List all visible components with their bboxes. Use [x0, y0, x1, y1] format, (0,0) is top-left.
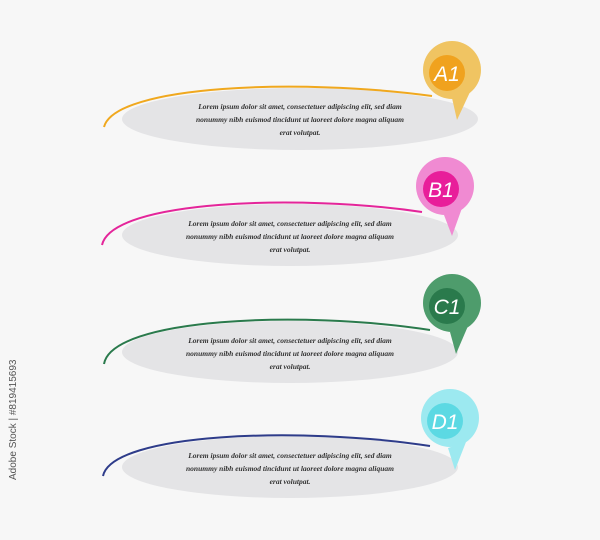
panel: C1: erat volutpat. — [270, 362, 311, 371]
panel: B1: B1 — [428, 179, 454, 202]
panel: B1: Lorem ipsum dolor sit amet, consectetuer adipiscing elit, sed diam — [187, 219, 392, 228]
panel: B1: erat volutpat. — [270, 245, 311, 254]
panel: A1: nonummy nibh euismod tincidunt ut laoreet dolore magna aliquam — [196, 115, 404, 124]
panel: D1: nonummy nibh euismod tincidunt ut laoreet dolore magna aliquam — [186, 464, 394, 473]
panel: D1: erat volutpat. — [270, 477, 311, 486]
panel: C1: Lorem ipsum dolor sit amet, consectetuer adipiscing elit, sed diam — [187, 336, 392, 345]
panel: C1 — [104, 274, 481, 383]
panel: B1 — [102, 157, 474, 266]
panel: D1 — [103, 389, 479, 498]
panel: A1 — [104, 41, 481, 150]
panel: A1: erat volutpat. — [280, 128, 321, 137]
panel: A1: Lorem ipsum dolor sit amet, consectetuer adipiscing elit, sed diam — [197, 102, 402, 111]
watermark id: Adobe Stock | #819415693 — [8, 359, 19, 480]
panel: C1: C1 — [434, 296, 460, 319]
panel: D1: Lorem ipsum dolor sit amet, consectetuer adipiscing elit, sed diam — [187, 451, 392, 460]
panel: A1: A1 — [432, 63, 460, 86]
panel: D1: D1 — [432, 411, 458, 434]
panel: C1: nonummy nibh euismod tincidunt ut laoreet dolore magna aliquam — [186, 349, 394, 358]
panel: B1: nonummy nibh euismod tincidunt ut laoreet dolore magna aliquam — [186, 232, 394, 241]
